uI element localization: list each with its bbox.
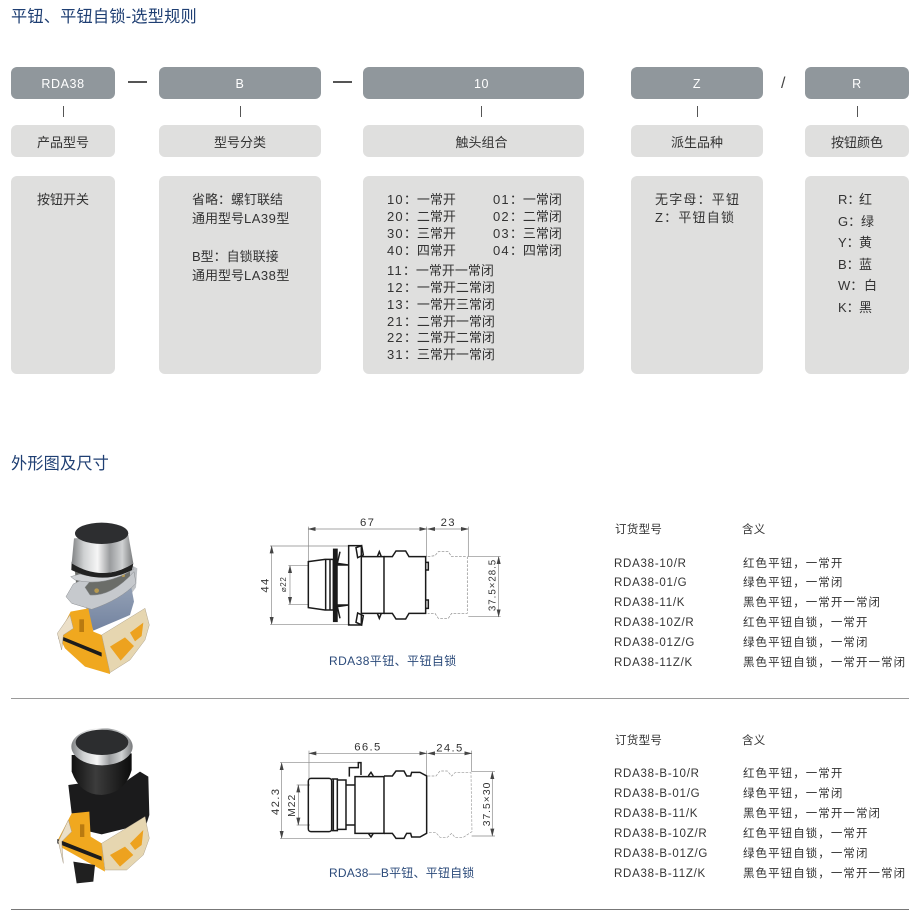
phantom outline	[428, 552, 467, 618]
panel: button colour detail: W：	[838, 278, 863, 293]
label: product model	[11, 125, 115, 157]
table: RDA38 order codes: 红色平钮自锁，一常开	[743, 617, 868, 629]
panel: product model detail	[11, 176, 115, 374]
table: RDA38 order codes: 红色平钮，一常开	[743, 558, 843, 570]
panel: derived variety detail: Z：平钮自锁	[655, 210, 735, 225]
table: RDA38 order codes: RDA38-01/G	[614, 577, 687, 589]
table: RDA38 order codes: 黑色平钮自锁，一常开一常闭	[743, 657, 906, 669]
panel: derived variety detail: 无字母：平钮	[655, 192, 740, 207]
table: RDA38 order codes: RDA38-11Z/K	[614, 657, 693, 669]
table: RDA38 order codes: RDA38-10Z/R	[614, 617, 694, 629]
panel: contact combination detail: 12：一常开二常闭	[387, 280, 495, 295]
label: model class	[159, 125, 321, 157]
connector tick 1	[62, 106, 64, 117]
table: RDA38 order codes: 含义	[742, 524, 766, 536]
panel: contact combination detail: 02：二常闭	[493, 209, 562, 224]
dimension lines	[270, 527, 501, 624]
panel: model class detail: 省略：螺钉联结	[192, 192, 283, 207]
table: RDA38-B order codes: RDA38-B-01Z/G	[614, 848, 708, 860]
dash separator 2	[333, 81, 352, 82]
panel: product model detail: 按钮开关	[37, 192, 89, 207]
code box: R: R	[852, 77, 862, 91]
panel: contact combination detail: 10：一常开	[387, 192, 456, 207]
panel: button colour detail: 黑	[859, 300, 872, 315]
dim M22: M22	[287, 794, 298, 817]
code box: R	[805, 67, 909, 99]
slash separator: /	[781, 75, 785, 92]
table: RDA38-B order codes: 绿色平钮，一常闭	[743, 788, 843, 800]
panel: model class detail: 通用型号LA39型	[192, 211, 289, 226]
panel: button colour detail: B：	[838, 257, 860, 272]
outline	[308, 546, 428, 625]
panel: contact combination detail: 03：三常闭	[493, 226, 562, 241]
panel: button colour detail: 蓝	[859, 257, 872, 272]
dash separator 1	[128, 81, 147, 82]
label: product model: 产品型号	[37, 135, 89, 150]
table: RDA38 order codes: 黑色平钮，一常开一常闭	[743, 597, 881, 609]
panel: model class detail: B型：自锁联接	[192, 249, 279, 264]
panel: button colour detail: R：	[838, 192, 860, 207]
divider 1	[11, 698, 909, 699]
panel: derived variety detail	[631, 176, 763, 374]
connector tick 2	[240, 106, 241, 117]
table: RDA38-B order codes: 含义	[742, 735, 766, 747]
table: RDA38-B order codes: 黑色平钮自锁，一常开一常闭	[743, 868, 906, 880]
connector tick 5	[856, 106, 858, 117]
phantom outline	[428, 771, 472, 837]
title: selection rules: 平钮、平钮自锁-选型规则	[11, 8, 197, 26]
panel: contact combination detail: 21：二常开一常闭	[387, 314, 495, 329]
table: RDA38-B order codes: RDA38-B-11/K	[614, 808, 698, 820]
dimension drawing: RDA38-B	[270, 742, 495, 838]
connector tick 3	[480, 106, 482, 117]
panel: contact combination detail: 04：四常闭	[493, 243, 562, 258]
panel: contact combination detail: 31：三常开一常闭	[387, 347, 495, 362]
table: RDA38-B order codes: RDA38-B-10Z/R	[614, 828, 707, 840]
panel: button colour detail: 白	[864, 278, 877, 293]
table: RDA38 order codes: RDA38-01Z/G	[614, 637, 695, 649]
label: derived variety	[631, 125, 763, 157]
dim 37.5x28.5: 37.5×28.5	[487, 559, 498, 611]
label: button colour: 按钮颜色	[831, 135, 883, 150]
table: RDA38 order codes: 绿色平钮自锁，一常闭	[743, 637, 868, 649]
label: model class: 型号分类	[214, 135, 266, 150]
label: derived variety: 派生品种	[671, 135, 723, 150]
dimension drawing: RDA38	[259, 517, 501, 625]
panel: button colour detail: G：	[838, 214, 861, 229]
code box: B	[159, 67, 321, 99]
dim 66.5: 66.5	[354, 742, 382, 754]
product photo: RDA38 metal flat button	[57, 523, 149, 674]
code box: RDA38: RDA38	[41, 77, 85, 91]
label: contact combination: 触头组合	[455, 135, 508, 150]
table: RDA38 order codes: RDA38-10/R	[614, 558, 687, 570]
panel: button colour detail: 绿	[861, 214, 874, 229]
table: RDA38-B order codes: RDA38-B-10/R	[614, 768, 700, 780]
label: button colour	[805, 125, 909, 157]
panel: button colour detail: 红	[859, 192, 872, 207]
panel: contact combination detail: 13：一常开三常闭	[387, 297, 495, 312]
connector tick 4	[696, 106, 698, 117]
caption: RDA38: RDA38平钮、平钮自锁	[329, 654, 457, 668]
panel: button colour detail: 黄	[859, 235, 872, 250]
panel: contact combination detail	[363, 176, 584, 374]
panel: model class detail	[159, 176, 321, 374]
panel: button colour detail: Y：	[838, 235, 860, 250]
dim 42.3: 42.3	[270, 788, 282, 815]
table: RDA38-B order codes: RDA38-B-01/G	[614, 788, 700, 800]
panel: contact combination detail: 30：三常开	[387, 226, 456, 241]
table: RDA38-B order codes	[614, 734, 906, 880]
dim 24.5: 24.5	[436, 742, 464, 754]
code box: Z	[631, 67, 763, 99]
table: RDA38-B order codes: 红色平钮，一常开	[743, 768, 843, 780]
dim 23: 23	[441, 517, 456, 529]
table: RDA38-B order codes: 红色平钮自锁，一常开	[743, 828, 868, 840]
dim 67: 67	[360, 517, 375, 529]
caption: RDA38-B: RDA38—B平钮、平钮自锁	[329, 866, 474, 880]
table: RDA38-B order codes: 黑色平钮，一常开一常闭	[743, 808, 881, 820]
table: RDA38-B order codes: 绿色平钮自锁，一常闭	[743, 848, 868, 860]
table: RDA38-B order codes: 订货型号	[615, 735, 662, 747]
table: RDA38 order codes: 订货型号	[615, 524, 662, 536]
panel: model class detail: 通用型号LA38型	[192, 268, 289, 283]
table: RDA38 order codes: 绿色平钮，一常闭	[743, 577, 843, 589]
heading: shape and dimensions: 外形图及尺寸	[11, 455, 109, 473]
panel: contact combination detail: 40：四常开	[387, 243, 456, 258]
panel: contact combination detail: 20：二常开	[387, 209, 456, 224]
panel: contact combination detail: 22：二常开二常闭	[387, 330, 495, 345]
dim dia 22: ⌀22	[279, 576, 288, 592]
divider 2	[11, 909, 909, 910]
code box: B: B	[236, 77, 244, 91]
table: RDA38 order codes: RDA38-11/K	[614, 597, 685, 609]
panel: button colour detail: K：	[838, 300, 860, 315]
code box: 10: 10	[474, 77, 489, 91]
panel: contact combination detail: 11：一常开一常闭	[387, 263, 494, 278]
outline	[308, 763, 427, 838]
dim 37.5x30: 37.5×30	[482, 782, 493, 826]
dimension lines	[280, 751, 495, 838]
dim 44: 44	[259, 577, 271, 593]
product photo: RDA38-B black flat button	[57, 728, 149, 883]
code box: RDA38	[11, 67, 115, 99]
table: RDA38-B order codes: RDA38-B-11Z/K	[614, 868, 706, 880]
code box: Z: Z	[693, 77, 701, 91]
panel: button colour detail	[805, 176, 909, 374]
label: contact combination	[363, 125, 584, 157]
panel: contact combination detail: 01：一常闭	[493, 192, 562, 207]
table: RDA38 order codes	[614, 523, 906, 669]
code box: 10	[363, 67, 584, 99]
